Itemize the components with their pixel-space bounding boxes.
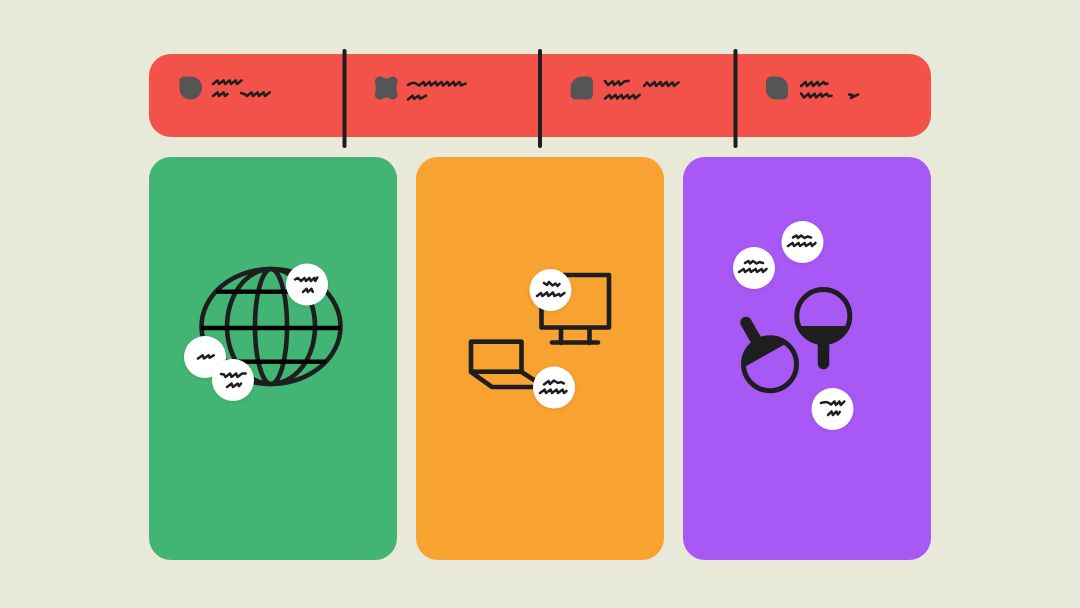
- icon: upright paddle: [797, 290, 850, 364]
- panel: orange devices card: [416, 157, 664, 560]
- panel: purple table tennis card: [683, 157, 931, 560]
- panel: green globe card: [149, 157, 397, 560]
- icon: tilted paddle: [743, 322, 796, 391]
- header item 1: [179, 76, 270, 100]
- icon: rounded blob 3: [766, 76, 788, 100]
- callout bubble: laptop: [533, 366, 575, 408]
- icon: desktop monitor: [542, 275, 609, 343]
- header item 4: [766, 76, 858, 100]
- callout bubble: globe bottom: [212, 359, 254, 401]
- divider 1: [342, 51, 346, 146]
- scribble label 2: [408, 82, 466, 100]
- divider 3: [734, 51, 738, 146]
- header item 2: [375, 76, 466, 100]
- scribble label 1: [213, 80, 270, 96]
- scribble label 4: [801, 82, 858, 98]
- icon: rounded blob 1: [179, 76, 202, 100]
- panel: red header bar: [149, 54, 931, 137]
- callout bubble: globe top right: [286, 264, 328, 306]
- callout bubble: left: [733, 247, 775, 289]
- header item 3: [570, 76, 679, 100]
- scribble label 3: [605, 81, 679, 98]
- callout bubble: bottom right: [812, 388, 854, 430]
- callout bubble: top: [782, 221, 824, 263]
- divider 2: [538, 51, 542, 146]
- icon: rounded blob 2: [570, 76, 593, 100]
- icon: laptop: [471, 342, 545, 387]
- callout bubble: monitor: [530, 269, 572, 311]
- icon: pinched blob: [375, 76, 398, 100]
- icon: globe: [201, 269, 341, 384]
- callout bubble: globe lower left: [184, 336, 226, 378]
